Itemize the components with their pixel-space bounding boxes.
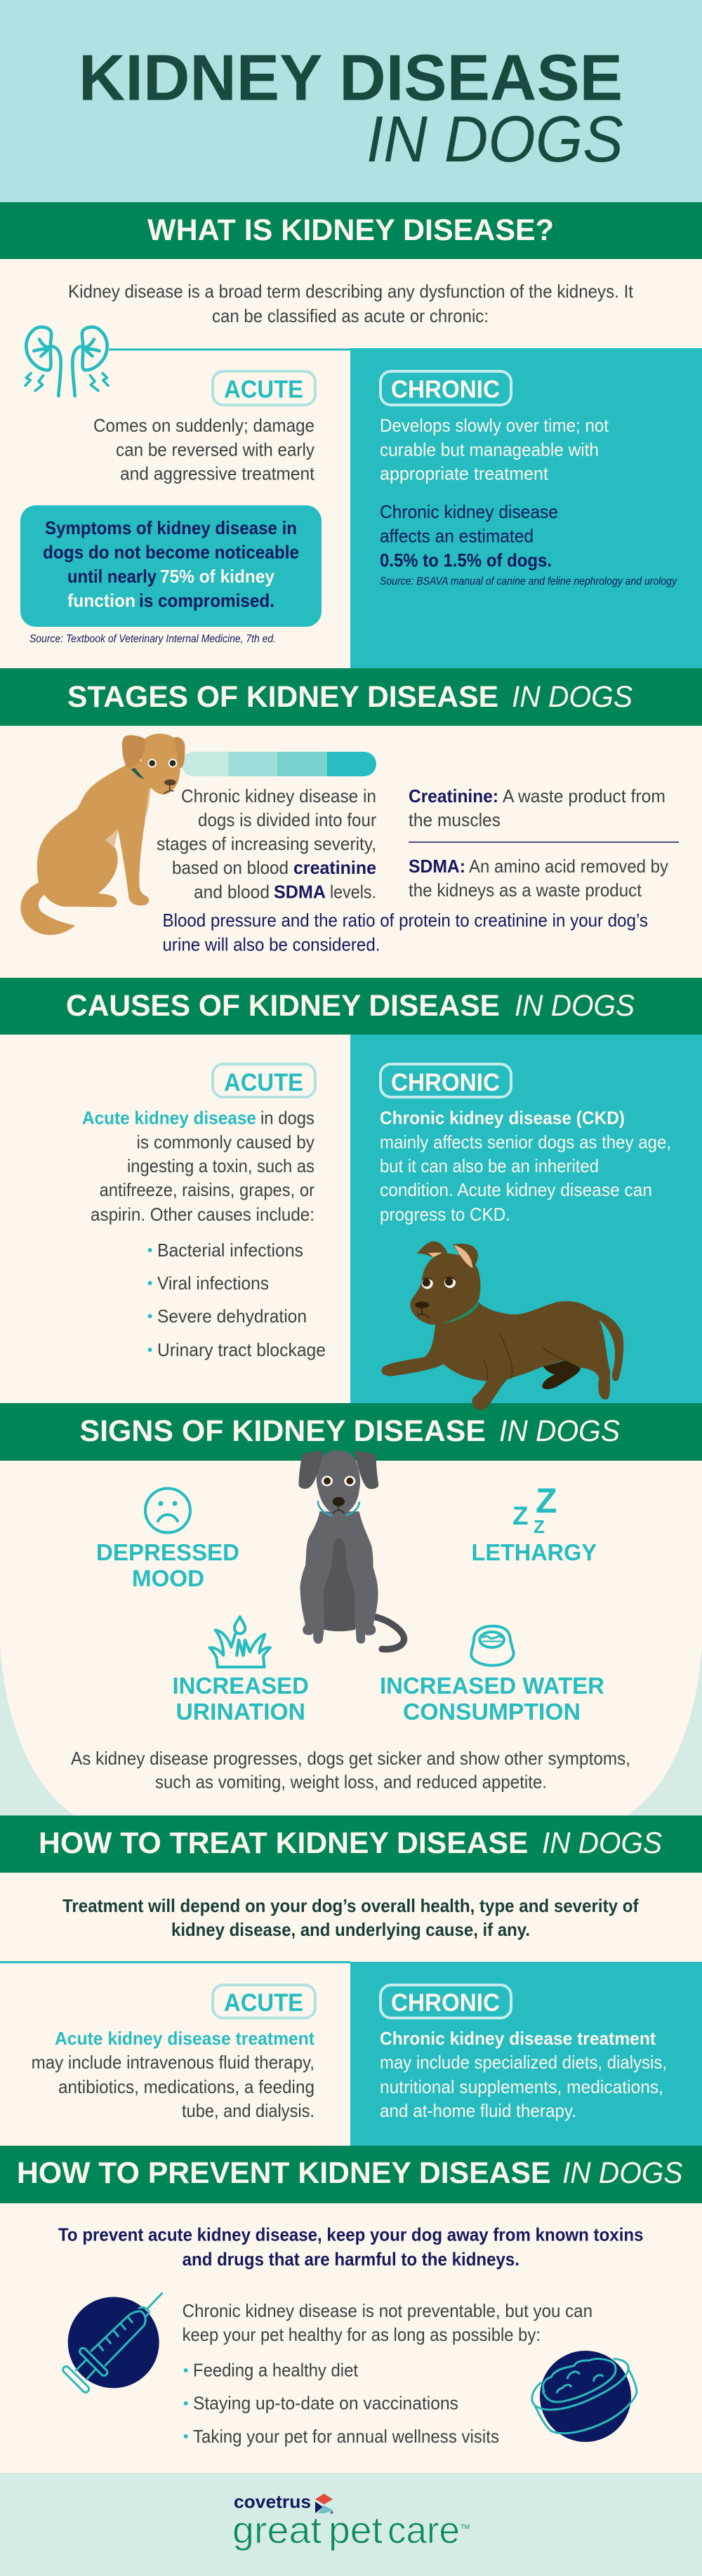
acute pill bbox=[213, 371, 315, 405]
footer panel with logo: great bbox=[232, 2509, 322, 2551]
progression text bbox=[71, 1748, 630, 1793]
icon: sleep z letters bbox=[512, 1481, 557, 1537]
chronic description: appropriate treatment bbox=[380, 463, 549, 484]
prevention intro bbox=[58, 2224, 643, 2270]
definition: creatinine: A waste product from bbox=[503, 785, 665, 806]
definition: creatinine: the muscles bbox=[409, 809, 501, 830]
icon: sleep z letters: Z bbox=[534, 1516, 545, 1537]
acute causes text: antifreeze, raisins, grapes, or bbox=[100, 1179, 314, 1200]
section heading: signs: SIGNS OF KIDNEY DISEASE bbox=[80, 1414, 486, 1448]
prevention intro: To prevent acute kidney disease, keep your dog away from known toxins bbox=[58, 2224, 643, 2245]
intro text: can be classified as acute or chronic: bbox=[212, 305, 489, 326]
callout: symptoms: dogs do not become noticeable bbox=[43, 542, 299, 563]
stage severity bar bbox=[181, 752, 376, 776]
icon: syringe bbox=[62, 2293, 162, 2394]
section heading: what is kidney disease: WHAT IS KIDNEY DISEASE? bbox=[147, 213, 554, 247]
stages description: SDMA bbox=[274, 882, 326, 903]
chronic treatment text: nutritional supplements, medications, bbox=[380, 2076, 663, 2097]
list: prevention steps: Staying up-to-date on vaccinations bbox=[193, 2393, 458, 2414]
chronic causes text: Chronic kidney disease (CKD) bbox=[380, 1108, 625, 1129]
sign: increased urination: INCREASED bbox=[173, 1673, 309, 1699]
section heading: what is kidney disease bbox=[0, 202, 702, 259]
acute causes text: ingesting a toxin, such as bbox=[127, 1155, 314, 1176]
section heading: signs bbox=[0, 1403, 702, 1461]
list: other causes: Severe dehydration bbox=[157, 1306, 307, 1327]
chronic causes text: condition. Acute kidney disease can bbox=[380, 1179, 652, 1200]
acute treatment text: may include intravenous fluid therapy, bbox=[32, 2052, 314, 2073]
acute causes text bbox=[82, 1108, 314, 1225]
list: other causes bbox=[148, 1240, 326, 1360]
chronic description: curable but manageable with bbox=[380, 439, 599, 460]
stages description: levels. bbox=[330, 882, 376, 903]
section heading: causes: CAUSES OF KIDNEY DISEASE bbox=[66, 989, 500, 1023]
sign: increased water consumption bbox=[380, 1673, 604, 1725]
acute description bbox=[93, 415, 315, 484]
panel: chronic background bbox=[350, 348, 702, 668]
section heading: causes bbox=[0, 978, 702, 1035]
definition: creatinine: Creatinine: bbox=[409, 785, 498, 806]
acute treatment text: tube, and dialysis. bbox=[182, 2100, 314, 2121]
chronic prevalence stat: 0.5% to 1.5% of dogs. bbox=[380, 550, 552, 571]
chronic causes text: mainly affects senior dogs as they age, bbox=[380, 1131, 671, 1153]
chronic treatment text bbox=[380, 2028, 667, 2121]
stages description bbox=[157, 785, 376, 903]
treatment intro: Treatment will depend on your dog’s overall health, type and severity of bbox=[62, 1895, 639, 1916]
chronic description: Develops slowly over time; not bbox=[380, 415, 609, 436]
blood pressure note bbox=[163, 910, 648, 955]
sign: increased water consumption: INCREASED WATER bbox=[380, 1673, 604, 1699]
definition: creatinine bbox=[409, 785, 665, 830]
prevention intro: and drugs that are harmful to the kidneys. bbox=[183, 2249, 519, 2270]
illustration: grey dog bbox=[299, 1450, 404, 1649]
acute causes text: in dogs bbox=[260, 1108, 314, 1129]
list: other causes: Viral infections bbox=[157, 1273, 269, 1294]
footer panel with logo: care bbox=[388, 2509, 460, 2551]
section heading: stages bbox=[0, 668, 702, 726]
panel: chronic causes background bbox=[350, 1035, 702, 1404]
treatment intro bbox=[62, 1895, 639, 1940]
definition: SDMA: the kidneys as a waste product bbox=[409, 879, 642, 901]
sign: lethargy: LETHARGY bbox=[472, 1539, 597, 1565]
sign: depressed mood bbox=[96, 1539, 239, 1591]
acute description: can be reversed with early bbox=[116, 439, 314, 460]
stages description: dogs is divided into four bbox=[198, 809, 376, 830]
callout: symptoms bbox=[20, 505, 322, 627]
acute causes text: aspirin. Other causes include: bbox=[91, 1204, 314, 1225]
footer panel with logo: TM bbox=[461, 2523, 470, 2530]
acute pill bbox=[213, 1985, 315, 2018]
section heading: stages: IN DOGS bbox=[512, 680, 633, 714]
callout: symptoms: Symptoms of kidney disease in bbox=[45, 517, 297, 538]
blood pressure note: urine will also be considered. bbox=[163, 934, 380, 955]
sign: increased water consumption: CONSUMPTION bbox=[403, 1699, 581, 1725]
chronic causes text bbox=[380, 1108, 671, 1225]
chronic causes text: but it can also be an inherited bbox=[380, 1155, 599, 1176]
acute causes text: Acute kidney disease bbox=[82, 1108, 256, 1129]
acute pill: ACUTE bbox=[224, 1069, 303, 1096]
acute causes text: is commonly caused by bbox=[136, 1131, 314, 1153]
sign: increased urination: URINATION bbox=[176, 1699, 305, 1725]
section heading: treat: HOW TO TREAT KIDNEY DISEASE bbox=[39, 1826, 528, 1860]
icon: food bowl bbox=[532, 2351, 637, 2442]
icon: kidneys bbox=[25, 327, 108, 396]
definition: SDMA: An amino acid removed by bbox=[469, 856, 668, 877]
stages description: Chronic kidney disease in bbox=[181, 785, 376, 806]
list: other causes: Urinary tract blockage bbox=[157, 1339, 326, 1360]
callout: symptoms: until nearly bbox=[67, 566, 157, 587]
chronic description bbox=[380, 415, 609, 484]
acute pill bbox=[213, 1064, 315, 1097]
acute treatment text: antibiotics, medications, a feeding bbox=[58, 2076, 314, 2097]
chronic treatment text: may include specialized diets, dialysis, bbox=[380, 2052, 667, 2073]
intro text: Kidney disease is a broad term describing any dysfunction of the kidneys. It bbox=[68, 281, 634, 302]
header panel with title: IN DOGS bbox=[366, 102, 623, 175]
acute description: and aggressive treatment bbox=[120, 463, 315, 484]
illustration: brown dog bbox=[381, 1241, 623, 1410]
section heading: prevent bbox=[0, 2146, 702, 2203]
chronic prevention text: keep your pet healthy for as long as possible by: bbox=[183, 2324, 541, 2345]
stages description: creatinine bbox=[293, 857, 376, 878]
icon: sleep z letters: Z bbox=[536, 1481, 557, 1520]
icon: water bowl bbox=[471, 1626, 514, 1666]
intro text bbox=[68, 281, 634, 326]
acute pill: ACUTE bbox=[224, 1989, 303, 2017]
source note: Source: Textbook of Veterinary Internal Medicine, 7th ed. bbox=[29, 633, 276, 645]
pale corners behind signs panel bbox=[0, 1642, 702, 1816]
chronic prevalence stat: Source: BSAVA manual of canine and feline nephrology and urology bbox=[380, 576, 677, 587]
definition: SDMA bbox=[409, 856, 668, 901]
acute treatment text bbox=[32, 2028, 314, 2121]
chronic pill: CHRONIC bbox=[391, 376, 500, 403]
chronic prevalence stat bbox=[380, 501, 677, 587]
chronic prevention text: Chronic kidney disease is not preventable, but you can bbox=[183, 2300, 592, 2321]
chronic prevalence stat: Chronic kidney disease bbox=[380, 501, 558, 522]
chronic prevention text bbox=[183, 2300, 592, 2345]
header panel with title bbox=[0, 0, 702, 203]
footer panel with logo: pet bbox=[329, 2509, 383, 2551]
section heading: treat: IN DOGS bbox=[542, 1826, 662, 1860]
list: prevention steps: Feeding a healthy diet bbox=[193, 2360, 359, 2381]
footer panel with logo: covetrus bbox=[234, 2491, 311, 2512]
chronic prevalence stat: affects an estimated bbox=[380, 525, 534, 546]
chronic pill: CHRONIC bbox=[391, 1069, 500, 1096]
acute treatment text: Acute kidney disease treatment bbox=[55, 2028, 314, 2049]
stages description: based on blood bbox=[172, 857, 289, 878]
callout: symptoms: is compromised. bbox=[139, 590, 274, 611]
sign: depressed mood: DEPRESSED bbox=[96, 1539, 239, 1565]
section heading: prevent: IN DOGS bbox=[562, 2156, 683, 2190]
list: prevention steps: Taking your pet for annual wellness visits bbox=[193, 2426, 499, 2447]
callout: symptoms: function bbox=[67, 590, 135, 611]
list: other causes: Bacterial infections bbox=[157, 1240, 303, 1261]
acute pill: ACUTE bbox=[224, 376, 303, 403]
chronic pill: CHRONIC bbox=[391, 1989, 500, 2017]
acute description: Comes on suddenly; damage bbox=[93, 415, 314, 436]
section heading: treat bbox=[0, 1815, 702, 1873]
chronic treatment text: Chronic kidney disease treatment bbox=[380, 2028, 656, 2049]
icon: urine on grass bbox=[209, 1616, 270, 1667]
list: prevention steps bbox=[184, 2360, 499, 2447]
blood pressure note: Blood pressure and the ratio of protein to creatinine in your dog’s bbox=[163, 910, 648, 931]
icon: sleep z letters: Z bbox=[512, 1501, 529, 1530]
section heading: signs: IN DOGS bbox=[499, 1414, 620, 1448]
callout: symptoms: 75% of kidney bbox=[160, 566, 274, 587]
footer panel with logo bbox=[0, 2473, 702, 2576]
treatment intro: kidney disease, and underlying cause, if any. bbox=[171, 1919, 530, 1940]
chronic treatment text: and at-home fluid therapy. bbox=[380, 2100, 576, 2121]
header panel with title: KIDNEY DISEASE bbox=[79, 41, 623, 114]
chronic causes text: progress to CKD. bbox=[380, 1204, 510, 1225]
sign: increased urination bbox=[173, 1673, 309, 1725]
illustration: tan dog bbox=[20, 733, 185, 935]
stages description: stages of increasing severity, bbox=[157, 833, 376, 854]
definition: SDMA: SDMA: bbox=[409, 856, 465, 877]
stages description: and blood bbox=[194, 882, 270, 903]
section heading: causes: IN DOGS bbox=[515, 989, 635, 1023]
icon: sad face bbox=[145, 1488, 190, 1533]
progression text: As kidney disease progresses, dogs get sicker and show other symptoms, bbox=[71, 1748, 630, 1769]
section heading: prevent: HOW TO PREVENT KIDNEY DISEASE bbox=[17, 2156, 550, 2190]
progression text: such as vomiting, weight loss, and reduced appetite. bbox=[155, 1772, 547, 1793]
panel: chronic treatment background bbox=[350, 1962, 702, 2146]
section heading: stages: STAGES OF KIDNEY DISEASE bbox=[67, 680, 498, 714]
sign: depressed mood: MOOD bbox=[132, 1565, 204, 1591]
